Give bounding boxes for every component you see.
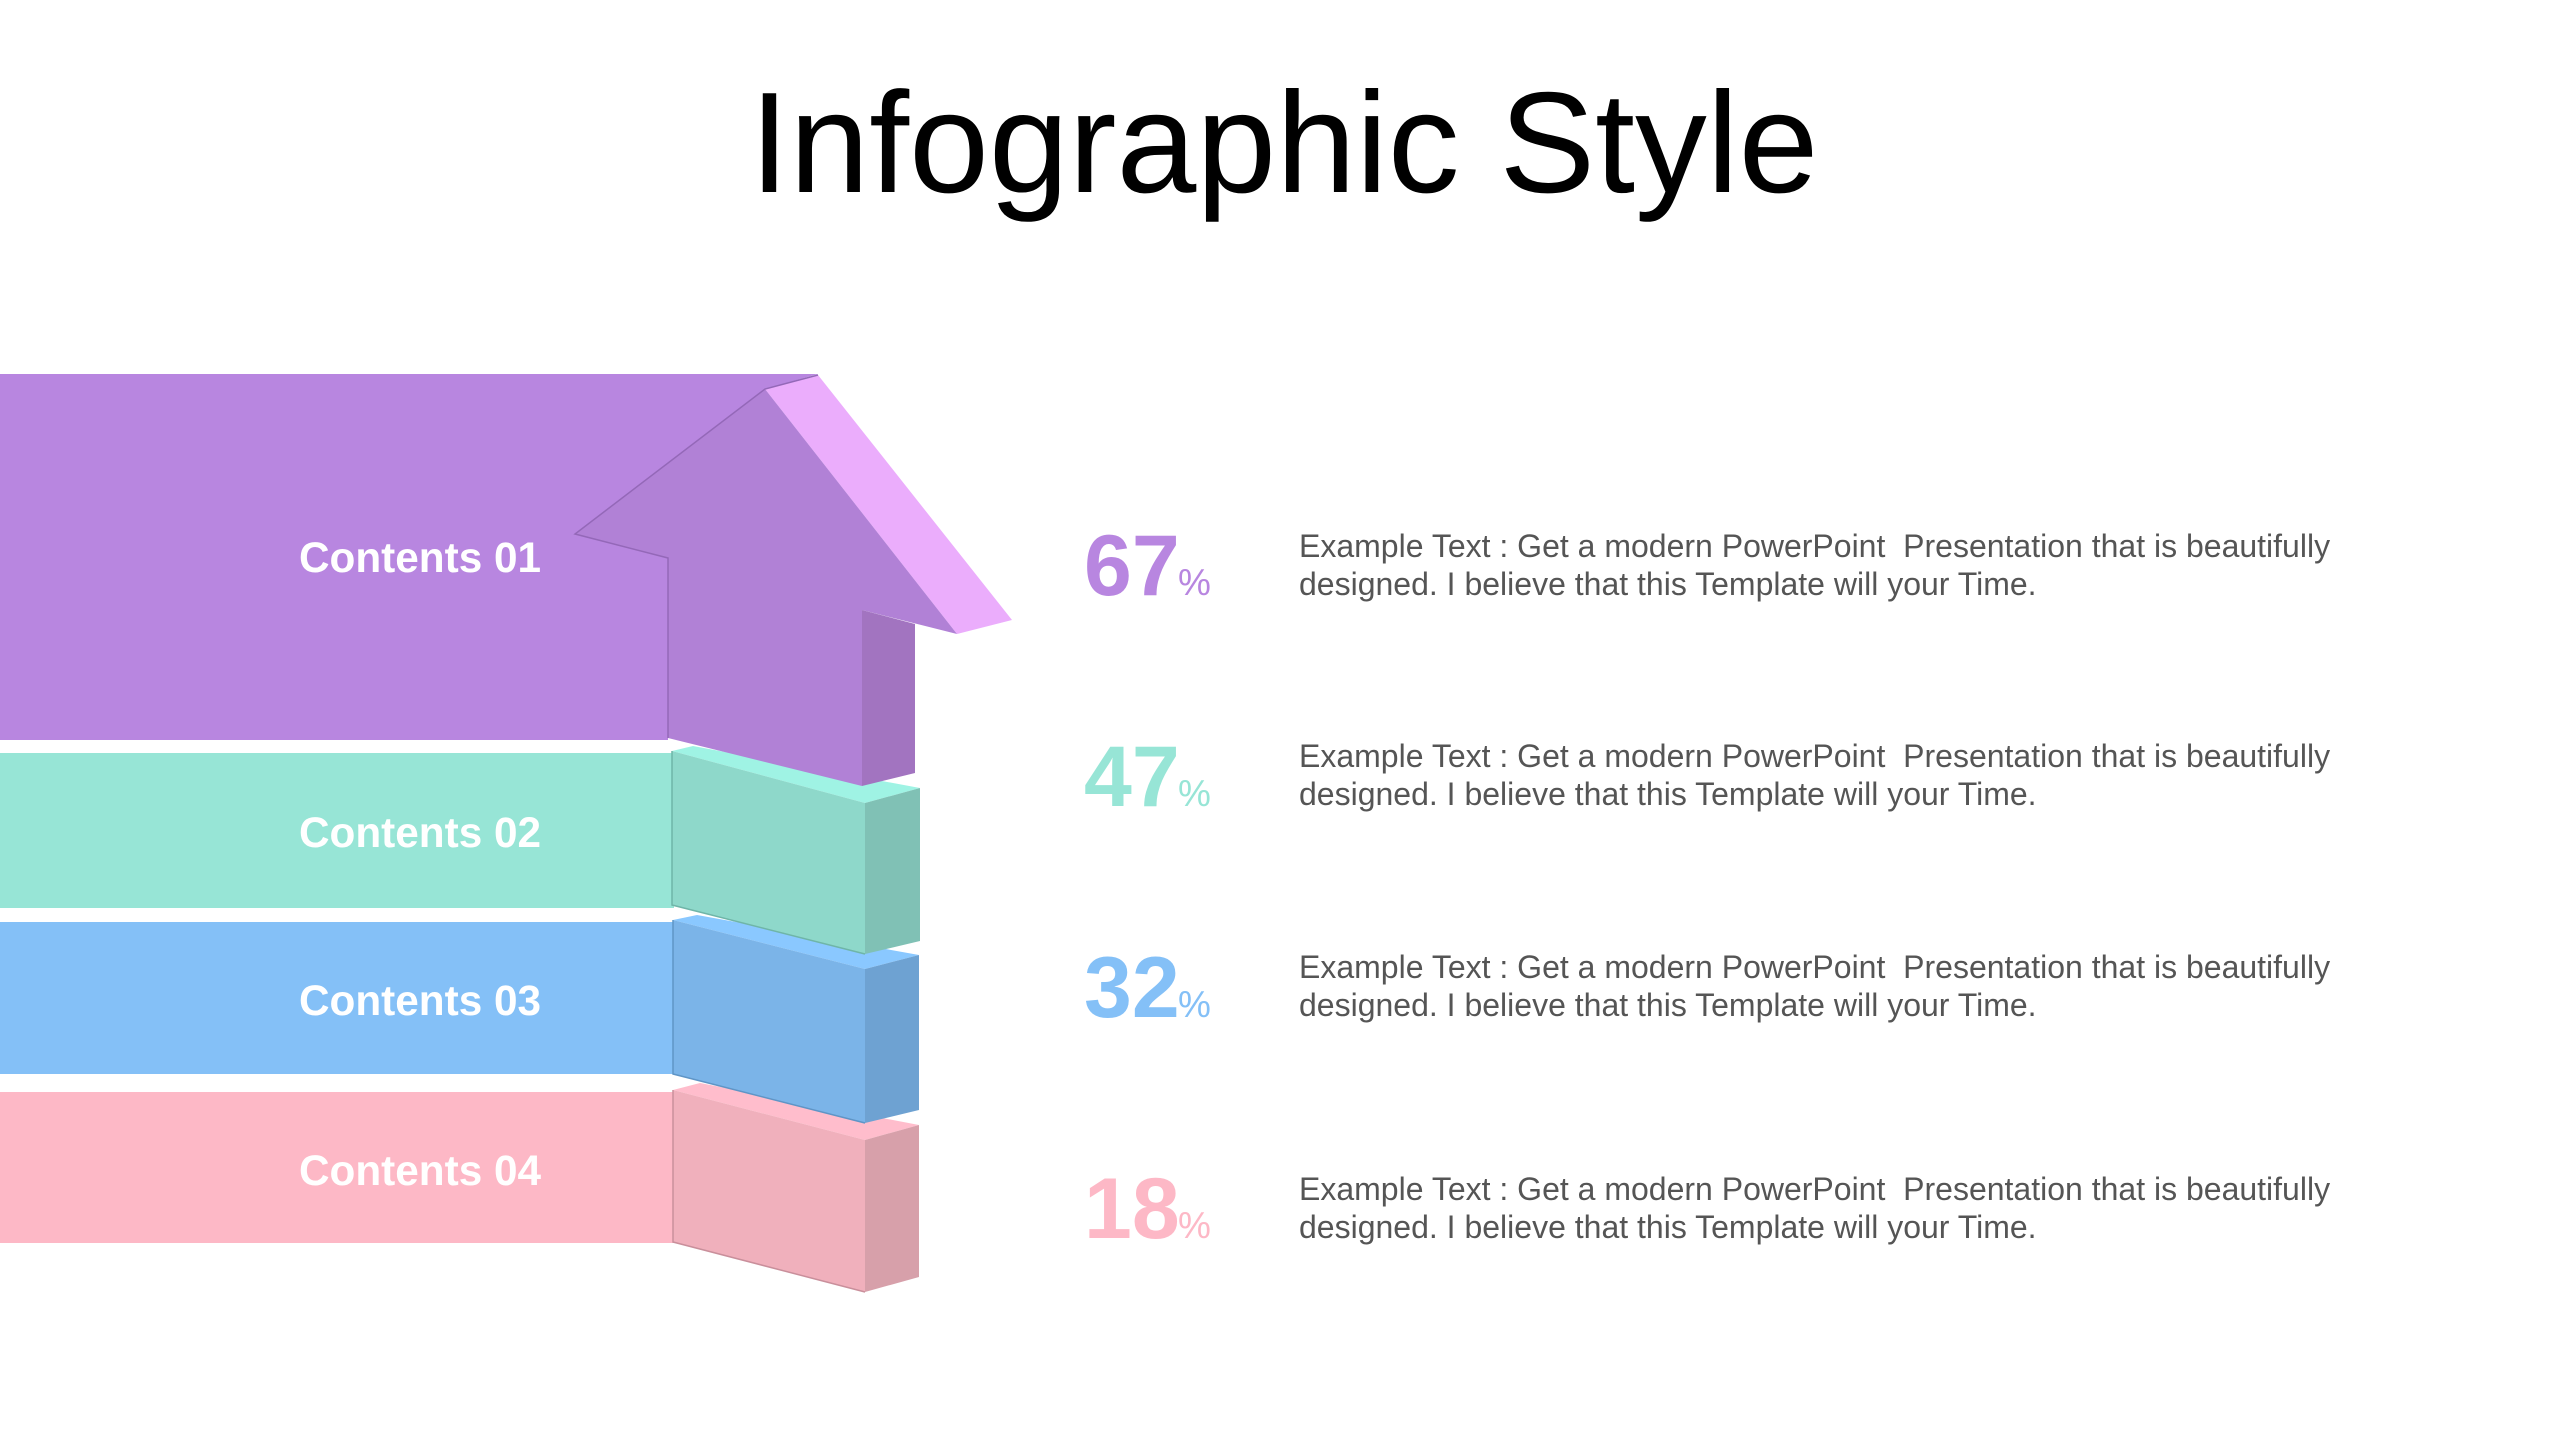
stat 47%: 47: [1084, 729, 1180, 825]
pink layer: Contents 04: Contents 04: [299, 1147, 542, 1194]
purple arrow layer: Contents 01: Contents 01: [299, 534, 541, 581]
stat 32%: 32: [1084, 940, 1180, 1036]
description 2: Example Text : Get a modern PowerPoint Presentation that is beautifully: [1299, 738, 2330, 774]
description 3: [1299, 949, 2330, 1023]
purple arrow layer: Contents 01: [0, 374, 1012, 786]
blue layer: Contents 03: Contents 03: [299, 977, 541, 1024]
description 3: Example Text : Get a modern PowerPoint Presentation that is beautifully: [1299, 949, 2330, 985]
description 4: [1299, 1171, 2330, 1245]
stat 67%: %: [1178, 562, 1211, 603]
description 1: designed. I believe that this Template will your Time.: [1299, 566, 2037, 602]
description 4: designed. I believe that this Template will your Time.: [1299, 1209, 2037, 1245]
description 1: Example Text : Get a modern PowerPoint Presentation that is beautifully: [1299, 528, 2330, 564]
blue layer: Contents 03: [0, 915, 919, 1123]
teal layer: Contents 02: Contents 02: [299, 809, 541, 856]
description 3: designed. I believe that this Template will your Time.: [1299, 987, 2037, 1023]
teal layer: Contents 02: [0, 746, 920, 954]
description 1: [1299, 528, 2330, 602]
description 2: [1299, 738, 2330, 812]
stat 18%: %: [1178, 1205, 1211, 1246]
title: Infographic Style: [750, 63, 1818, 223]
stat 47%: %: [1178, 773, 1211, 814]
pink layer: Contents 04: [0, 1083, 919, 1292]
stat 32%: %: [1178, 984, 1211, 1025]
stat 18%: 18: [1084, 1161, 1180, 1257]
description 4: Example Text : Get a modern PowerPoint Presentation that is beautifully: [1299, 1171, 2330, 1207]
stat 67%: 67: [1084, 518, 1180, 614]
description 2: designed. I believe that this Template will your Time.: [1299, 776, 2037, 812]
